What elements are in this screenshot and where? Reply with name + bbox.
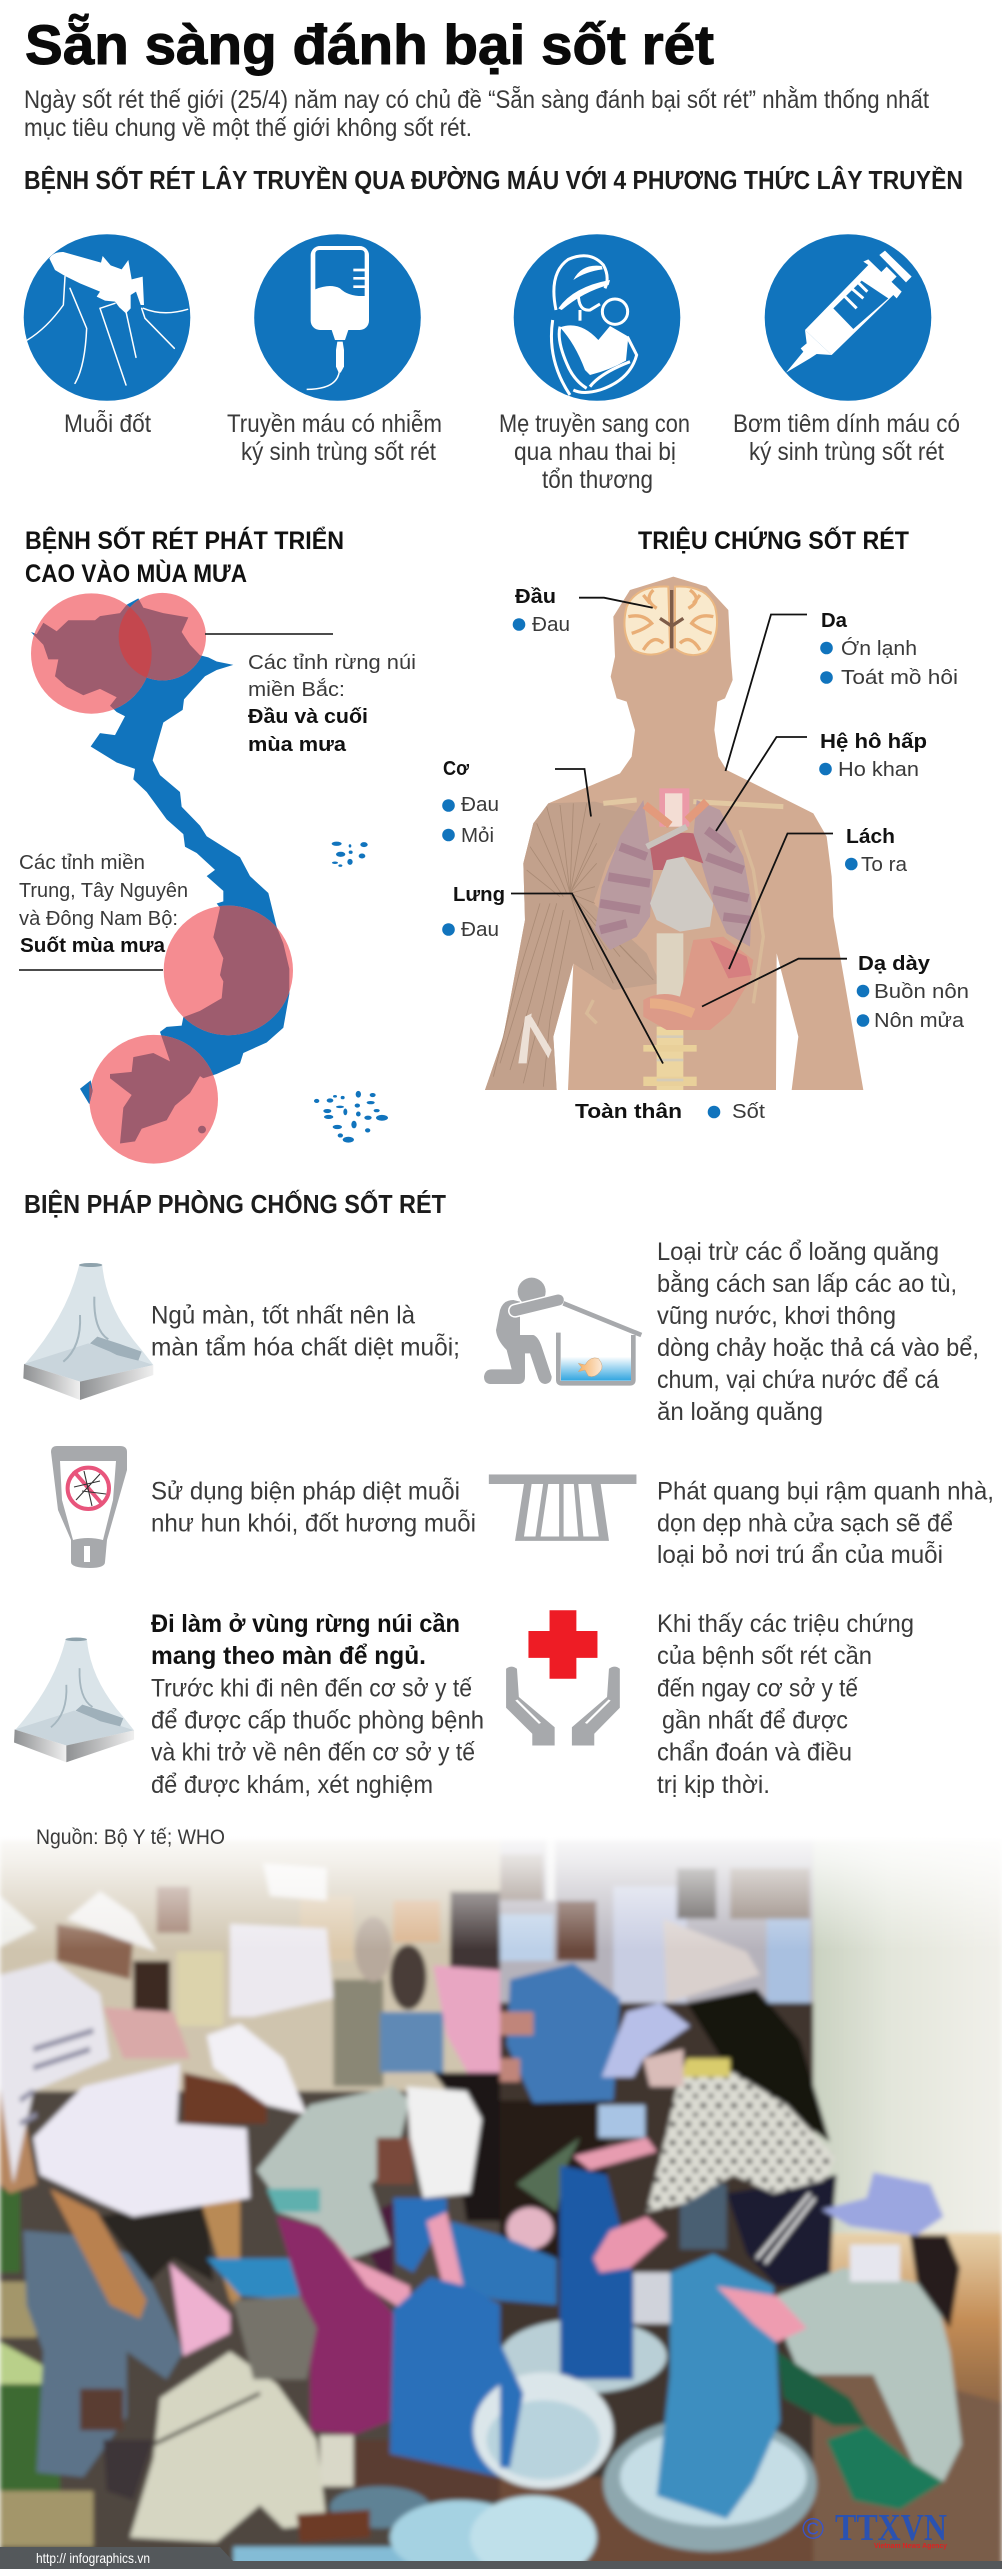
- callout: head: Đau: [532, 614, 570, 636]
- text: sleep under net: Ngủ màn, tốt nhất nên là: [151, 1302, 415, 1330]
- photo left half: [0, 1840, 530, 2569]
- callout: skin: Da: [821, 610, 848, 632]
- text: forest work advice: để được khám, xét nghiệm: [151, 1771, 433, 1799]
- panel: body diagram: [485, 577, 863, 1090]
- labels: symptoms: [442, 586, 969, 1123]
- muscles: [485, 802, 660, 1090]
- callout: respiratory: Ho khan: [838, 759, 919, 781]
- brain: [624, 587, 717, 655]
- watermark: TTXVN: TTXVN: [835, 2507, 947, 2549]
- callout: back: [442, 884, 663, 1064]
- callout: spleen: [729, 826, 908, 969]
- caption: mother to child: Mẹ truyền sang con: [499, 410, 690, 438]
- text: repel mosquitoes: như hun khói, đốt hương muỗi: [151, 1508, 476, 1538]
- heading: prevention: BIỆN PHÁP PHÒNG CHỐNG SỐT RÉT: [24, 1189, 446, 1219]
- skeleton: [587, 800, 783, 1090]
- text: sleep under net: [151, 1302, 460, 1362]
- callout: whole body: [575, 1101, 765, 1123]
- text: seek care: của bệnh sốt rét cần: [657, 1642, 872, 1670]
- callout: central and southeast: và Đông Nam Bộ:: [19, 908, 178, 930]
- callout: northern mountains: [205, 634, 416, 756]
- body silhouette: [485, 577, 863, 1090]
- caption: blood transfusion: Truyền máu có nhiễm: [227, 409, 442, 438]
- Hoang Sa islands: [332, 842, 368, 867]
- callout: head: [513, 586, 653, 636]
- text: clear bushes: loại bỏ nơi trú ẩn của muỗi: [657, 1540, 943, 1569]
- watermark: TTXVN: [802, 2507, 947, 2550]
- heading: rainy season: CAO VÀO MÙA MƯA: [25, 558, 247, 588]
- Truong Sa islands: [314, 1091, 388, 1143]
- text: forest work advice: Đi làm ở vùng rừng núi cần: [151, 1610, 460, 1638]
- callout: back: Lưng: [453, 884, 505, 906]
- callout: muscle: [442, 758, 591, 847]
- risk circles: [31, 593, 293, 1164]
- callout: respiratory: [716, 731, 927, 831]
- callout: skin: Ớn lạnh: [841, 637, 917, 660]
- heading: rainy season: BỆNH SỐT RÉT PHÁT TRIỂN: [25, 525, 344, 555]
- icon: blood bag: [254, 234, 421, 401]
- text: seek care: Khi thấy các triệu chứng: [657, 1610, 914, 1638]
- caption: mosquito bite: Muỗi đốt: [64, 409, 151, 438]
- callout: northern mountains: Các tỉnh rừng núi: [248, 652, 416, 674]
- icon: portable net: [14, 1638, 134, 1762]
- text: seek care: chẩn đoán và điều: [657, 1738, 852, 1766]
- callout: spleen: Lách: [846, 826, 895, 848]
- photo top fade: [0, 1825, 1002, 1950]
- callout: skin: Toát mồ hôi: [841, 667, 958, 689]
- heading: symptoms: TRIỆU CHỨNG SỐT RÉT: [638, 525, 909, 555]
- caption: mother to child: [499, 410, 690, 494]
- callout: respiratory: Hệ hô hấp: [820, 731, 927, 753]
- text: seek care: đến ngay cơ sở y tế: [657, 1674, 858, 1702]
- caption: mother to child: qua nhau thai bị: [514, 438, 676, 466]
- callout: whole body: Sốt: [732, 1101, 765, 1123]
- intro text: [24, 85, 929, 142]
- callout: central and southeast: [19, 852, 188, 970]
- callout: stomach: Nôn mửa: [874, 1010, 965, 1032]
- text: repel mosquitoes: Sử dụng biện pháp diệt muỗi: [151, 1476, 460, 1506]
- callout: stomach: [702, 953, 969, 1032]
- text: seek care: trị kịp thời.: [657, 1771, 770, 1799]
- text: eliminate larvae habitats: dòng chảy hoặc thả cá vào bể,: [657, 1334, 979, 1362]
- source: Nguồn: Bộ Y tế; WHO: [36, 1826, 225, 1849]
- icon: bed net: [23, 1263, 153, 1400]
- text: sleep under net: màn tẩm hóa chất diệt muỗi;: [151, 1332, 460, 1362]
- lungs: [595, 800, 752, 950]
- callout: central and southeast: Các tỉnh miền: [19, 852, 145, 874]
- callout: central and southeast: Suốt mùa mưa: [20, 935, 166, 957]
- icon: red cross and hands: [506, 1610, 620, 1746]
- caption: blood transfusion: [227, 409, 442, 466]
- caption: mother to child: tổn thương: [542, 466, 653, 494]
- photo: net dipping scene: [0, 1800, 1002, 2569]
- callout: muscle: Mỏi: [461, 825, 494, 847]
- text: eliminate larvae habitats: Loại trừ các ổ loăng quăng: [657, 1238, 939, 1266]
- text: forest work advice: mang theo màn để ngủ.: [151, 1642, 426, 1670]
- text: eliminate larvae habitats: [657, 1238, 979, 1426]
- footer bar: http:// infographics.vn: [36, 2550, 150, 2566]
- callout: whole body: Toàn thân: [575, 1101, 682, 1123]
- icon: rake: [489, 1474, 636, 1541]
- icon: repellent tube: [51, 1446, 127, 1568]
- caption: contaminated needle: Bơm tiêm dính máu có: [733, 410, 960, 438]
- callout: central and southeast: Trung, Tây Nguyên: [19, 880, 188, 902]
- callout: stomach: Dạ dày: [858, 953, 931, 975]
- icon: mosquito: [24, 234, 190, 401]
- map: Vietnam risk regions: [19, 593, 416, 1164]
- icon: person and water tank with fish: [484, 1278, 641, 1384]
- map shape: [31, 598, 289, 1143]
- text: eliminate larvae habitats: ăn loăng quăng: [657, 1398, 823, 1426]
- caption: contaminated needle: ký sinh trùng sốt rét: [749, 438, 944, 466]
- text: clear bushes: Phát quang bụi rậm quanh nhà,: [657, 1478, 994, 1506]
- text: eliminate larvae habitats: chum, vại chứa nước để cá: [657, 1366, 939, 1394]
- text: eliminate larvae habitats: vũng nước, khơi thông: [657, 1302, 896, 1330]
- text: clear bushes: [657, 1478, 994, 1569]
- photo right half: [470, 1840, 1002, 2569]
- title: Sẵn sàng đánh bại sốt rét: [25, 13, 714, 76]
- stomach and spleen: [643, 933, 753, 1030]
- callout: skin: [726, 610, 958, 771]
- text: seek care: [657, 1610, 914, 1799]
- callout: northern mountains: Đầu và cuối: [248, 706, 368, 728]
- watermark: TTXVN: Vietnam News Agency: [874, 2543, 947, 2550]
- text: forest work advice: [151, 1610, 484, 1799]
- callout: spleen: To ra: [861, 854, 908, 876]
- text: eliminate larvae habitats: bằng cách san lấp các ao tù,: [657, 1269, 957, 1298]
- callout: northern mountains: mùa mưa: [248, 734, 347, 756]
- icon: mother and child: [514, 234, 680, 401]
- heading: rainy season: [25, 525, 344, 588]
- text: repel mosquitoes: [151, 1476, 476, 1538]
- text: forest work advice: Trước khi đi nên đến cơ sở y tế: [151, 1674, 472, 1702]
- caption: contaminated needle: [733, 410, 960, 466]
- callout: muscle: Đau: [461, 794, 499, 816]
- callout: stomach: Buồn nôn: [874, 981, 969, 1003]
- watermark: TTXVN: ©: [802, 2513, 824, 2546]
- callout: head: Đầu: [515, 586, 556, 608]
- intro text: mục tiêu chung về một thế giới không sốt rét.: [24, 114, 472, 142]
- callout: muscle: Cơ: [443, 758, 470, 780]
- callout: northern mountains: miền Bắc:: [248, 678, 345, 701]
- text: clear bushes: dọn dẹp nhà cửa sạch sẽ để: [657, 1510, 953, 1538]
- footer bar: [0, 2547, 1002, 2569]
- text: forest work advice: để được cấp thuốc phòng bệnh: [151, 1706, 484, 1734]
- panel: prevention measures: [14, 1238, 994, 1799]
- trachea and heart: [645, 788, 713, 932]
- panel: four transmission routes: [24, 234, 960, 494]
- caption: blood transfusion: ký sinh trùng sốt rét: [241, 438, 436, 466]
- text: seek care: gần nhất để được: [662, 1706, 848, 1734]
- callout: back: Đau: [461, 919, 499, 941]
- text: forest work advice: và khi trở về nên đến cơ sở y tế: [151, 1738, 475, 1766]
- icon: syringe: [765, 234, 931, 401]
